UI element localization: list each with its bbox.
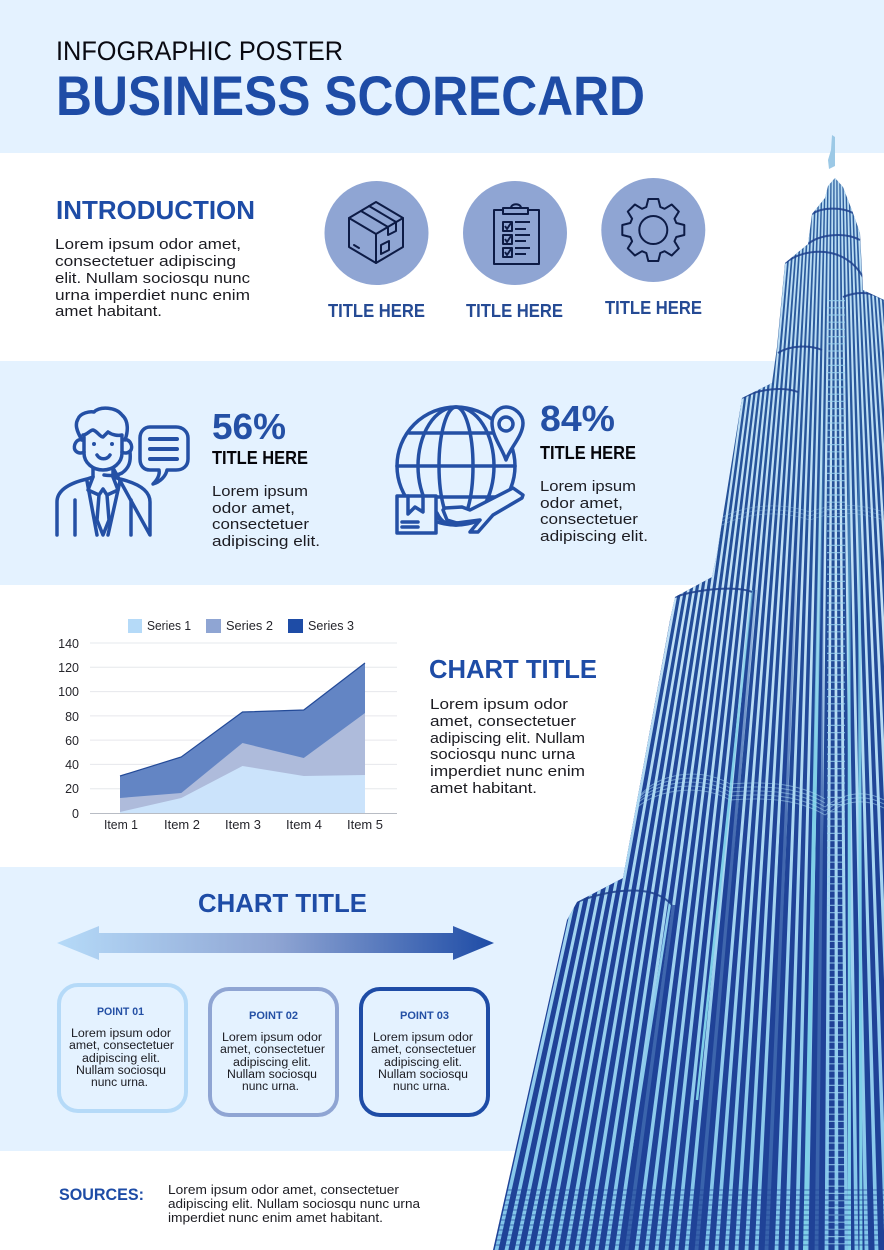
text block: chart description: amet habitant. <box>430 780 537 797</box>
card: point 02: POINT 02 <box>249 1010 298 1022</box>
text block: introduction: elit. Nullam sociosqu nunc <box>55 270 251 287</box>
label: title here 2: TITLE HERE <box>466 301 563 321</box>
chart legend: Series 1 <box>147 619 191 633</box>
card: point 02 <box>210 989 337 1115</box>
arrow: double-headed gradient <box>57 926 494 960</box>
heading: sources: SOURCES: <box>59 1185 144 1204</box>
chart legend: Series 2 <box>226 619 273 633</box>
card: point 03 <box>361 989 488 1115</box>
text block: stat 1: consectetuer <box>212 516 309 533</box>
heading: chart title: CHART TITLE <box>198 888 367 918</box>
panel: points section <box>0 867 884 1151</box>
heading: chart title: CHART TITLE <box>429 654 597 684</box>
text block: chart description: sociosqu nunc urna <box>430 746 576 763</box>
card: point 02: amet, consectetuer <box>220 1044 325 1056</box>
card: point 03: amet, consectetuer <box>371 1044 476 1056</box>
text block: sources: adipiscing elit. Nullam sociosqu nunc urna <box>168 1196 421 1211</box>
card: point 01: nunc urna. <box>91 1077 148 1089</box>
card: point 03: adipiscing elit. <box>384 1057 462 1069</box>
icon: box in circle <box>324 181 428 285</box>
card: point 01: adipiscing elit. <box>82 1053 160 1065</box>
card: point 01: POINT 01 <box>97 1006 144 1018</box>
card: point 02: Nullam sociosqu <box>227 1069 317 1081</box>
area chart: 100 <box>58 685 79 699</box>
text block: introduction <box>55 236 251 320</box>
text block: chart description: Lorem ipsum odor <box>430 696 568 713</box>
card: point 03: Lorem ipsum odor <box>373 1032 473 1044</box>
card: point 02: Lorem ipsum odor <box>222 1032 322 1044</box>
panel: area chart section <box>0 585 884 867</box>
text block: chart description <box>430 696 585 797</box>
card: point 01: Nullam sociosqu <box>76 1065 166 1077</box>
text block: stat 1: odor amet, <box>212 500 295 517</box>
area chart <box>58 637 397 832</box>
title: infographic poster: INFOGRAPHIC POSTER <box>56 36 343 66</box>
area chart: Item 2 <box>164 818 200 832</box>
text block: introduction: Lorem ipsum odor amet, <box>55 236 241 253</box>
text block: stat 2: consectetuer <box>540 511 638 528</box>
text block: stat 1: Lorem ipsum <box>212 483 308 500</box>
text block: chart description: adipiscing elit. Nullam <box>430 730 585 747</box>
icon: gear in circle <box>601 178 705 282</box>
area chart: Item 5 <box>347 818 383 832</box>
text block: stat 1: adipiscing elit. <box>212 533 320 550</box>
card: point 03: POINT 03 <box>400 1010 449 1022</box>
label: title here 1: TITLE HERE <box>328 301 425 321</box>
card: point 01 <box>59 985 186 1111</box>
card: point 03: nunc urna. <box>393 1081 450 1093</box>
text block: stat 2: Lorem ipsum <box>540 478 636 495</box>
text block: stat 2: adipiscing elit. <box>540 528 648 545</box>
chart legend <box>128 619 354 633</box>
heading: introduction: INTRODUCTION <box>56 195 255 225</box>
area chart: 0 <box>72 807 79 821</box>
card: point 02: adipiscing elit. <box>233 1057 311 1069</box>
text block: stat 2 <box>540 478 648 545</box>
illustration: skyscraper tower <box>493 135 884 1250</box>
text block: introduction: amet habitant. <box>55 303 162 320</box>
label: title here: TITLE HERE <box>212 448 308 468</box>
chart legend: Series 3 <box>308 619 354 633</box>
icon: clipboard in circle <box>463 181 567 285</box>
area chart: 120 <box>58 661 79 675</box>
icon: globe with delivery <box>397 407 523 533</box>
text block: chart description: amet, consectetuer <box>430 713 576 730</box>
text block: stat 1 <box>212 483 320 550</box>
text block: sources <box>168 1182 421 1225</box>
area chart: Item 3 <box>225 818 261 832</box>
area chart: 40 <box>65 758 79 772</box>
area chart: Item 1 <box>104 818 138 832</box>
title: business scorecard: BUSINESS SCORECARD <box>56 64 645 127</box>
stat: 84 percent: 84% <box>540 398 615 439</box>
label: title here 3: TITLE HERE <box>605 298 702 318</box>
area chart: 20 <box>65 782 79 796</box>
text block: introduction: urna imperdiet nunc enim <box>55 287 250 304</box>
icon: support agent <box>57 408 188 535</box>
area chart: 140 <box>58 637 79 651</box>
text block: introduction: consectetuer adipiscing <box>55 253 236 270</box>
card: point 03: Nullam sociosqu <box>378 1069 468 1081</box>
panel: sources <box>0 1151 884 1250</box>
panel: header <box>0 0 884 153</box>
label: title here: TITLE HERE <box>540 443 636 463</box>
text block: sources: Lorem ipsum odor amet, consectetuer <box>168 1182 400 1197</box>
text block: stat 2: odor amet, <box>540 495 623 512</box>
card: point 02: nunc urna. <box>242 1081 299 1093</box>
panel: statistics <box>0 361 884 585</box>
area chart: Item 4 <box>286 818 322 832</box>
card: point 01: amet, consectetuer <box>69 1040 174 1052</box>
text block: sources: imperdiet nunc enim amet habitant. <box>168 1210 383 1225</box>
card: point 01: Lorem ipsum odor <box>71 1028 171 1040</box>
text block: chart description: imperdiet nunc enim <box>430 763 585 780</box>
panel: introduction <box>0 153 884 361</box>
area chart: 80 <box>65 710 79 724</box>
area chart: 60 <box>65 734 79 748</box>
stat: 56 percent: 56% <box>212 406 286 447</box>
